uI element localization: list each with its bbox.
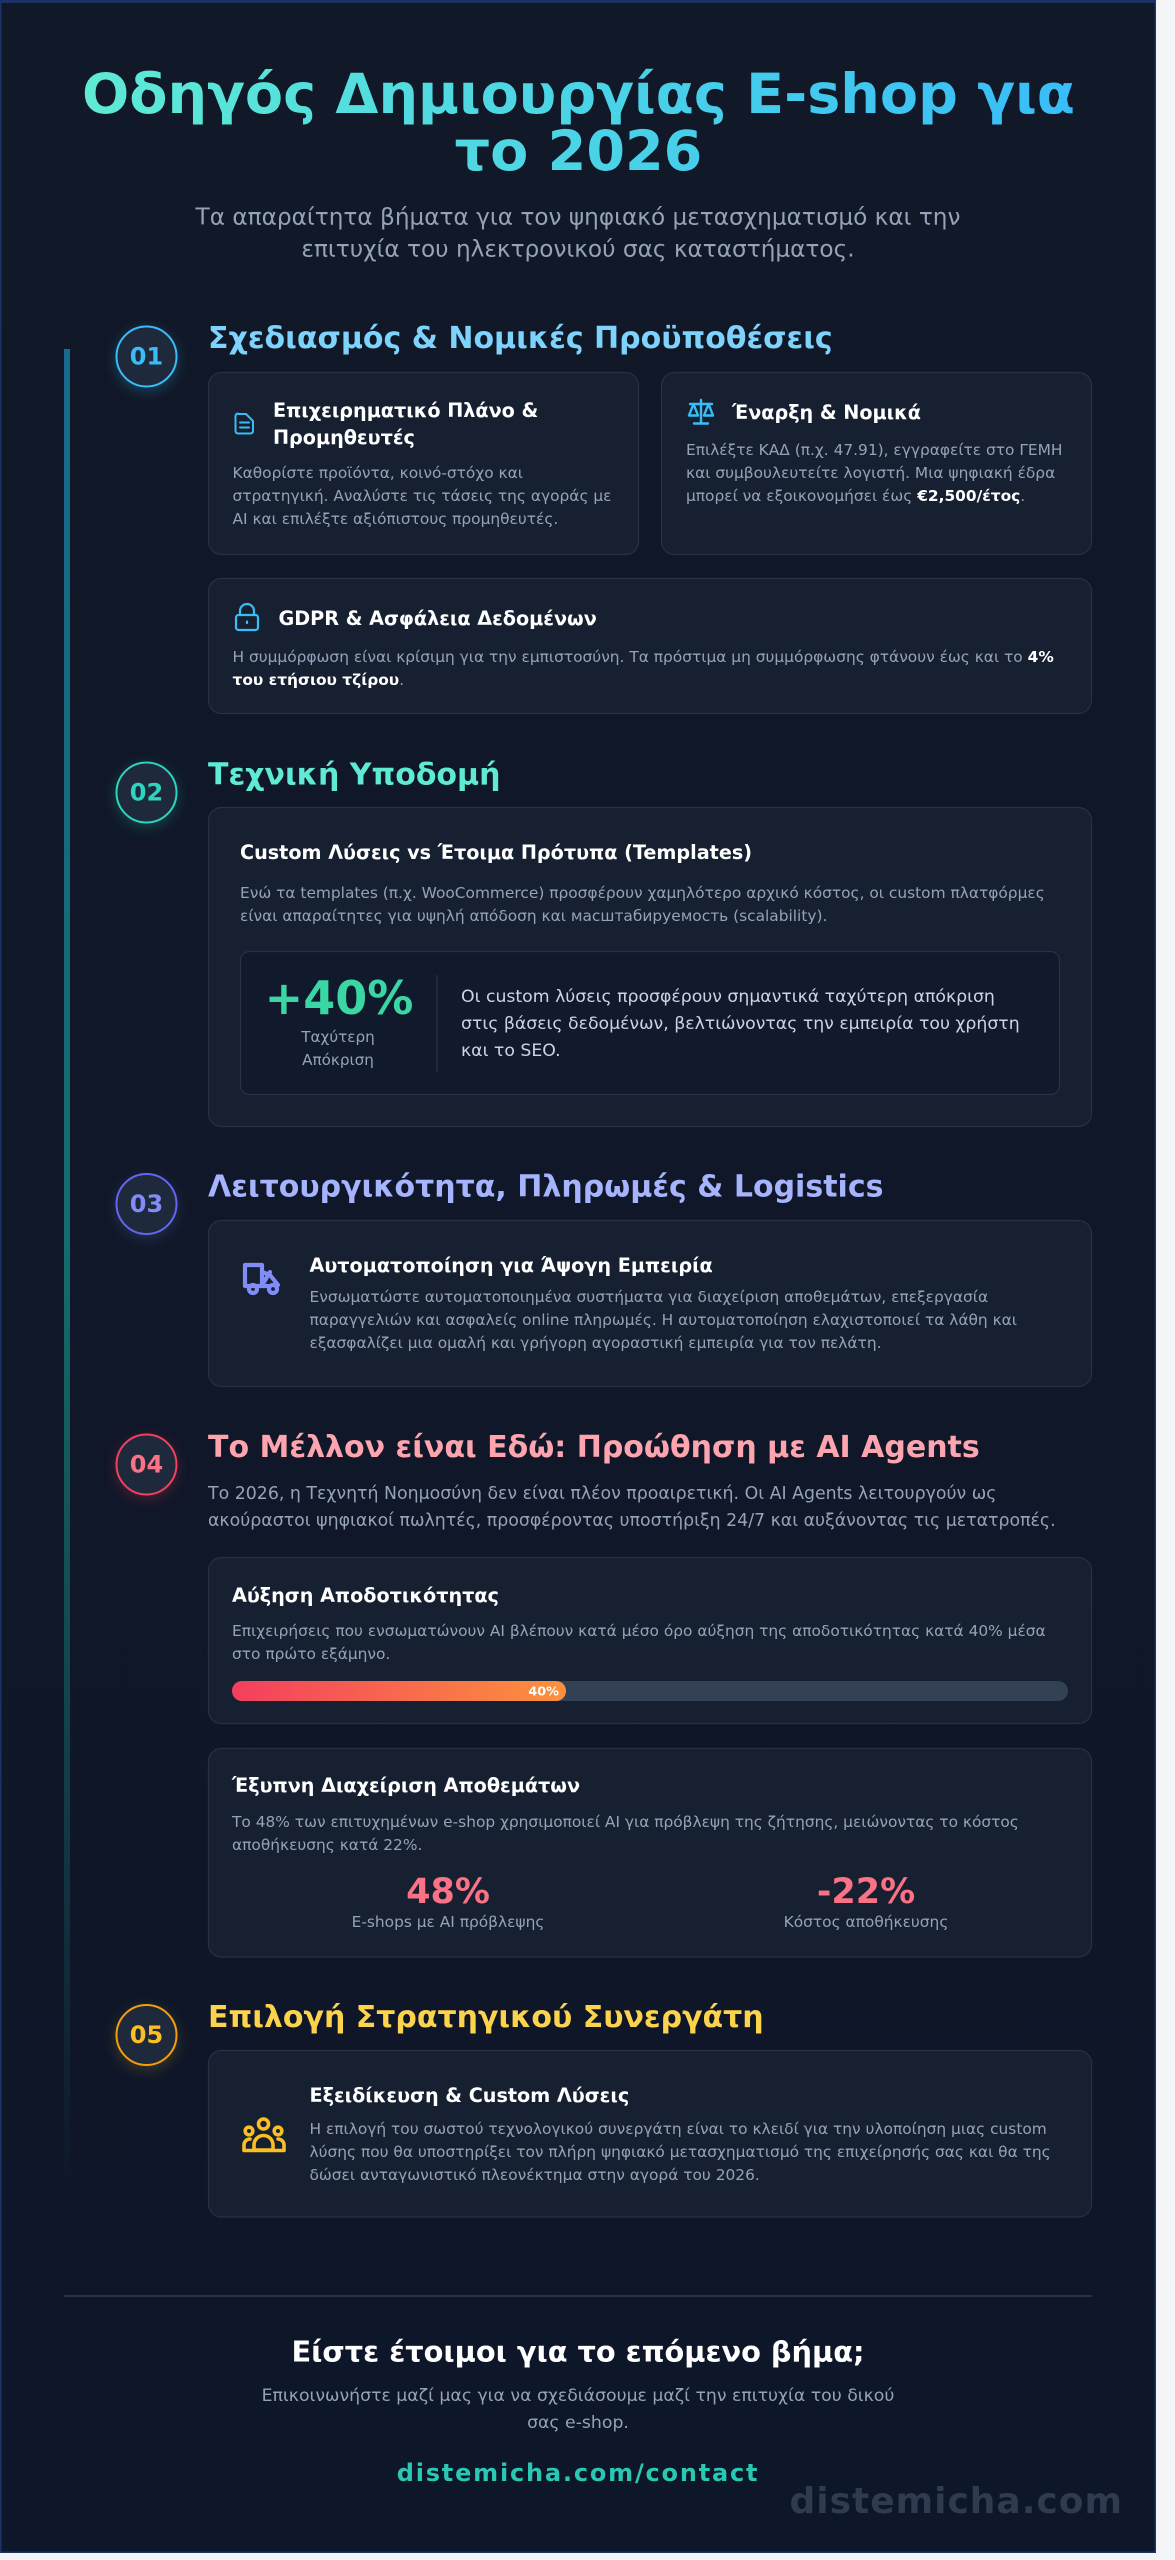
section 1 marker bbox=[116, 326, 176, 390]
section 5 marker: 05 bbox=[130, 2021, 163, 2049]
section 5 heading: Επιλογή Στρατηγικού Συνεργάτη bbox=[208, 2000, 764, 2035]
call to action text: Επικοινωνήστε μαζί μας για να σχεδιάσουμε μαζί την επιτυχία του δικού bbox=[262, 2386, 894, 2406]
callout: +40%: Απόκριση bbox=[302, 1051, 374, 1069]
panel: legal: Έναρξη & Νομικά bbox=[731, 401, 921, 424]
call to action heading: Είστε έτοιμοι για το επόμενο βήμα; bbox=[291, 2334, 865, 2368]
section 4 intro: ακούραστοι ψηφιακοί πωλητές, προσφέροντας υποστήριξη 24/7 και αυξάνοντας τις μετατροπές. bbox=[208, 1511, 1056, 1531]
panel: automation: Ενσωματώστε αυτοματοποιημένα συστήματα για διαχείριση αποθεμάτων, επεξεργασία bbox=[310, 1288, 988, 1306]
progress bar: 40% bbox=[232, 1681, 1068, 1701]
icon: document bbox=[236, 414, 253, 434]
panel: automation: Αυτοματοποίηση για Άψογη Εμπειρία bbox=[310, 1254, 713, 1277]
panel: legal: μπορεί να εξοικονομήσει έως €2,500/έτος. bbox=[686, 487, 1025, 505]
panel: automation: εξασφαλίζει μια ομαλή και γρήγορη αγοραστική εμπειρία για τον πελάτη. bbox=[310, 1334, 881, 1352]
panel: business plan: AI και επιλέξτε αξιόπιστους προμηθευτές. bbox=[232, 510, 558, 528]
panel: business plan: Επιχειρηματικό Πλάνο & bbox=[273, 399, 538, 422]
icon: scales bbox=[689, 400, 713, 424]
callout: +40%: Οι custom λύσεις προσφέρουν σημαντικά ταχύτερη απόκριση bbox=[461, 987, 995, 1007]
stat: 48%: E-shops με AI πρόβλεψης bbox=[352, 1913, 544, 1931]
callout: +40% bbox=[240, 952, 1060, 1094]
section 4 marker: 04 bbox=[130, 1450, 163, 1478]
section 4 intro: Το 2026, η Τεχνητή Νοημοσύνη δεν είναι πλέον προαιρετική. Οι AI Agents λειτουργούν ως bbox=[207, 1484, 996, 1504]
callout: +40%: στις βάσεις δεδομένων, βελτιώνοντας την εμπειρία του χρήστη bbox=[461, 1014, 1020, 1034]
watermark: distemicha.com bbox=[789, 2481, 1123, 2522]
panel: gdpr: GDPR & Ασφάλεια Δεδομένων bbox=[278, 607, 597, 630]
panel: partner: Η επιλογή του σωστού τεχνολογικού συνεργάτη είναι το κλειδί για την υλοποίηση μιας custom bbox=[310, 2120, 1047, 2138]
panel: gdpr: Η συμμόρφωση είναι κρίσιμη για την εμπιστοσύνη. Τα πρόστιμα μη συμμόρφωσης φτάνουν έως και το 4% bbox=[232, 648, 1054, 666]
section 4 intro bbox=[207, 1484, 1056, 1531]
panel: custom vs templates bbox=[208, 808, 1092, 1126]
panel: smart inventory: αποθήκευσης κατά 22%. bbox=[232, 1836, 422, 1854]
panel: legal bbox=[662, 372, 1092, 554]
timeline line bbox=[64, 349, 70, 2190]
panel: custom vs templates: είναι απαραίτητες για υψηλή απόδοση και масштабируемость (scalability). bbox=[240, 907, 827, 925]
panel: efficiency: Επιχειρήσεις που ενσωματώνουν AI βλέπουν κατά μέσο όρο αύξηση της αποδοτικότητας κατά 40% μέσα bbox=[232, 1622, 1046, 1640]
panel: smart inventory: Έξυπνη Διαχείριση Αποθεμάτων bbox=[231, 1774, 580, 1797]
call to action text bbox=[262, 2386, 894, 2433]
panel: efficiency bbox=[208, 1558, 1092, 1724]
section 2 heading: Τεχνική Υποδομή bbox=[208, 758, 500, 792]
call to action text: σας e-shop. bbox=[527, 2413, 629, 2433]
panel: business plan: Προμηθευτές bbox=[273, 426, 415, 449]
section 1 heading: Σχεδιασμός & Νομικές Προϋποθέσεις bbox=[208, 321, 833, 356]
footer divider bbox=[64, 2295, 1092, 2297]
panel: business plan bbox=[208, 372, 638, 554]
panel: partner: λύσης που θα υποστηρίξει τον πλήρη ψηφιακό μετασχηματισμό της επιχείρησής σας και θα της bbox=[310, 2143, 1051, 2161]
title: το 2026 bbox=[455, 119, 702, 184]
panel: custom vs templates: Ενώ τα templates (π.χ. WooCommerce) προσφέρουν χαμηλότερο αρχικό κόστος, οι custom πλατφόρμες bbox=[240, 884, 1045, 902]
section 3 marker bbox=[116, 1174, 176, 1238]
panel: automation: παραγγελιών και ασφαλείς online πληρωμές. Η αυτοματοποίηση ελαχιστοποιεί τα λάθη και bbox=[310, 1311, 1017, 1329]
title bbox=[82, 62, 1075, 184]
stat: -22% bbox=[784, 1872, 948, 1931]
section 3 heading: Λειτουργικότητα, Πληρωμές & Logistics bbox=[208, 1170, 883, 1204]
callout: +40%: +40% bbox=[265, 971, 413, 1025]
panel: efficiency: στο πρώτο εξάμηνο. bbox=[232, 1645, 390, 1663]
subtitle bbox=[195, 204, 960, 262]
icon: truck bbox=[245, 1265, 278, 1293]
panel: partner: δώσει ανταγωνιστικό πλεονέκτημα στην αγορά του 2026. bbox=[310, 2166, 760, 2184]
section 3 marker: 03 bbox=[130, 1190, 163, 1218]
title: Οδηγός Δημιουργίας E-shop για bbox=[82, 62, 1075, 127]
panel: automation bbox=[208, 1220, 1092, 1386]
panel: business plan: Καθορίστε προϊόντα, κοινό-στόχο και bbox=[232, 464, 523, 482]
stat: 48%: 48% bbox=[406, 1872, 490, 1912]
stat: -22%: -22% bbox=[817, 1872, 915, 1912]
callout: +40%: και το SEO. bbox=[461, 1041, 561, 1061]
panel: legal: και συμβουλευτείτε λογιστή. Μια ψηφιακή έδρα bbox=[686, 464, 1055, 482]
stat: 48% bbox=[352, 1872, 544, 1931]
section 5 marker bbox=[116, 2005, 176, 2069]
panel: legal: Επιλέξτε ΚΑΔ (π.χ. 47.91), εγγραφείτε στο ΓΕΜΗ bbox=[686, 441, 1062, 459]
subtitle: Τα απαραίτητα βήματα για τον ψηφιακό μετασχηματισμό και την bbox=[195, 204, 960, 230]
contact link: distemicha.com/contact bbox=[397, 2459, 759, 2487]
section 2 marker: 02 bbox=[130, 778, 163, 806]
panel: business plan: στρατηγική. Αναλύστε τις τάσεις της αγοράς με bbox=[232, 487, 611, 505]
icon: people bbox=[244, 2119, 284, 2150]
progress bar: 40%: 40% bbox=[528, 1684, 559, 1700]
panel: smart inventory: Το 48% των επιτυχημένων e-shop χρησιμοποιεί AI για πρόβλεψη της ζήτησης, μειώνοντας το κόστος bbox=[231, 1813, 1019, 1831]
section 2 marker bbox=[116, 762, 176, 826]
panel: gdpr: του ετήσιου τζίρου. bbox=[232, 671, 404, 689]
panel: gdpr bbox=[208, 578, 1092, 714]
stat: -22%: Κόστος αποθήκευσης bbox=[784, 1913, 948, 1931]
panel: smart inventory bbox=[208, 1748, 1092, 1957]
section 4 heading: Το Μέλλον είναι Εδώ: Προώθηση με AI Agents bbox=[208, 1430, 980, 1465]
section 4 marker bbox=[116, 1434, 176, 1498]
panel: custom vs templates: Custom Λύσεις vs Έτοιμα Πρότυπα (Templates) bbox=[240, 841, 752, 864]
section 1 marker: 01 bbox=[130, 342, 163, 370]
panel: partner bbox=[208, 2050, 1092, 2217]
subtitle: επιτυχία του ηλεκτρονικού σας καταστήματος. bbox=[301, 236, 855, 262]
panel: efficiency: Αύξηση Αποδοτικότητας bbox=[232, 1584, 499, 1607]
callout: +40%: Ταχύτερη bbox=[300, 1028, 375, 1046]
panel: partner: Εξειδίκευση & Custom Λύσεις bbox=[310, 2084, 629, 2107]
icon: lock bbox=[236, 604, 258, 630]
